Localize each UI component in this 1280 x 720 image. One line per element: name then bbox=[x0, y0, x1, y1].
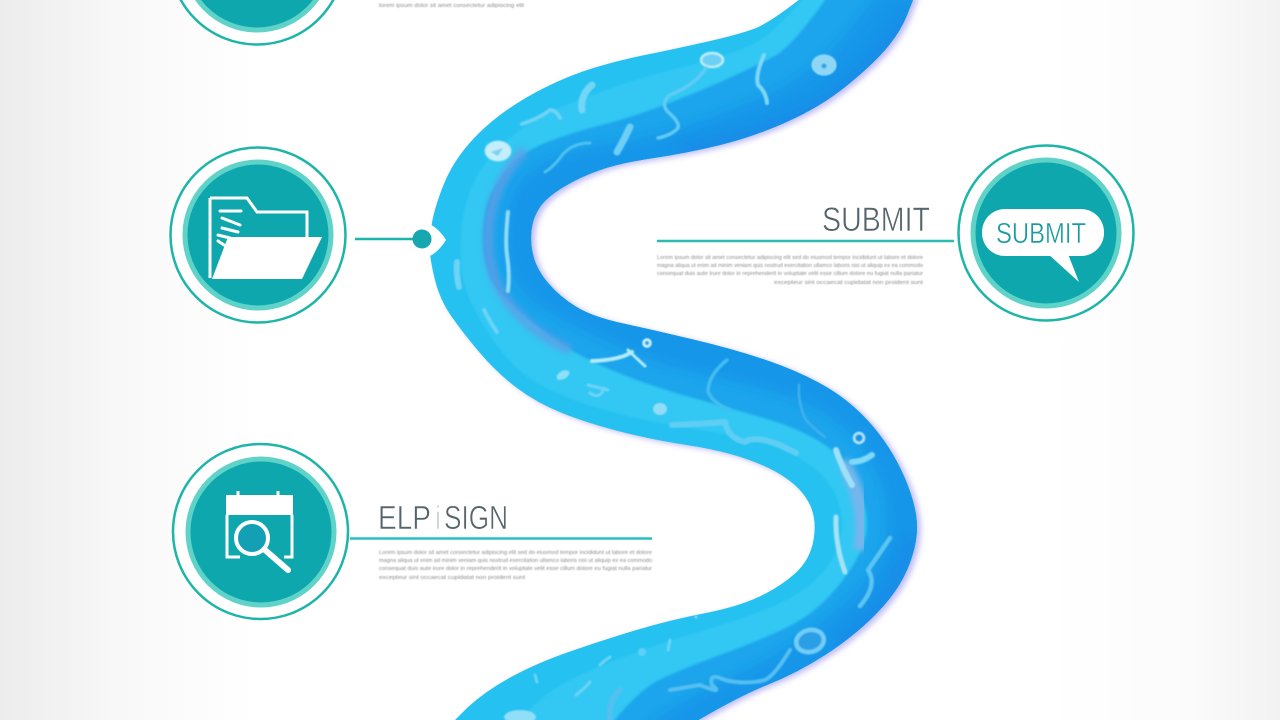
winding blue river bbox=[420, 0, 940, 720]
body text bbox=[657, 255, 923, 286]
top text fragment: lorem ipsum dolor sit amet consectetur adipiscing elit bbox=[379, 3, 524, 9]
river notch bbox=[422, 222, 446, 259]
body text: Lorem ipsum dolor sit amet consectetur adipiscing elit sed do eiusmod tempor incididunt ut labore et dolore bbox=[379, 550, 652, 556]
icon: calendar with magnifier bbox=[226, 491, 293, 570]
body text: excepteur sint occaecat cupidatat non proident sunt bbox=[379, 575, 525, 581]
river wisps and floating shapes bbox=[457, 53, 890, 720]
heading: elp sign: ELP bbox=[378, 499, 431, 536]
section: submit heading and text bbox=[657, 201, 954, 286]
connector line and dot bbox=[355, 222, 446, 259]
body text: magna aliqua ut enim ad minim veniam quis nostrud exercitation ullamco laboris nisi ut aliquip ex ea commodo bbox=[657, 263, 923, 269]
icon: speech bubble bbox=[982, 209, 1104, 282]
body text bbox=[379, 550, 652, 581]
body text: excepteur sint occaecat cupidatat non proident sunt bbox=[774, 280, 923, 286]
step circle: submit speech bubble bbox=[958, 146, 1134, 320]
heading: elp sign: SIGN bbox=[444, 499, 508, 536]
lower river creatures bbox=[484, 310, 890, 720]
heading: elp sign bbox=[378, 499, 508, 536]
icon: open folder bbox=[210, 198, 322, 279]
heading: elp sign: i bbox=[436, 499, 440, 536]
icon: speech bubble: SUBMIT bbox=[996, 218, 1086, 250]
heading: submit: SUBMIT bbox=[822, 201, 930, 239]
step circle: top (cropped) bbox=[170, 0, 344, 44]
rule bbox=[350, 537, 652, 540]
body text: magna aliqua ut enim ad minim veniam quis nostrud exercitation ullamco laboris nisi ut aliquip ex ea commodo bbox=[379, 558, 652, 564]
river water bands bbox=[420, 0, 940, 720]
rule bbox=[657, 240, 954, 242]
step circle: calendar search bbox=[173, 444, 348, 619]
river purple edge shadow bbox=[434, 0, 921, 720]
body text: consequat duis aute irure dolor in reprehenderit in voluptate velit esse cillum dolore eu fugiat nulla pariatur bbox=[657, 271, 923, 277]
body text: Lorem ipsum dolor sit amet consectetur adipiscing elit sed do eiusmod tempor incididunt ut labore et dolore bbox=[657, 255, 923, 261]
body text: consequat duis aute irure dolor in reprehenderit in voluptate velit esse cillum dolore eu fugiat nulla pariatur bbox=[379, 566, 652, 572]
upper river creatures bbox=[457, 53, 836, 291]
step circle: folder icon bbox=[170, 148, 346, 322]
section: elp sign heading and text bbox=[350, 499, 652, 581]
